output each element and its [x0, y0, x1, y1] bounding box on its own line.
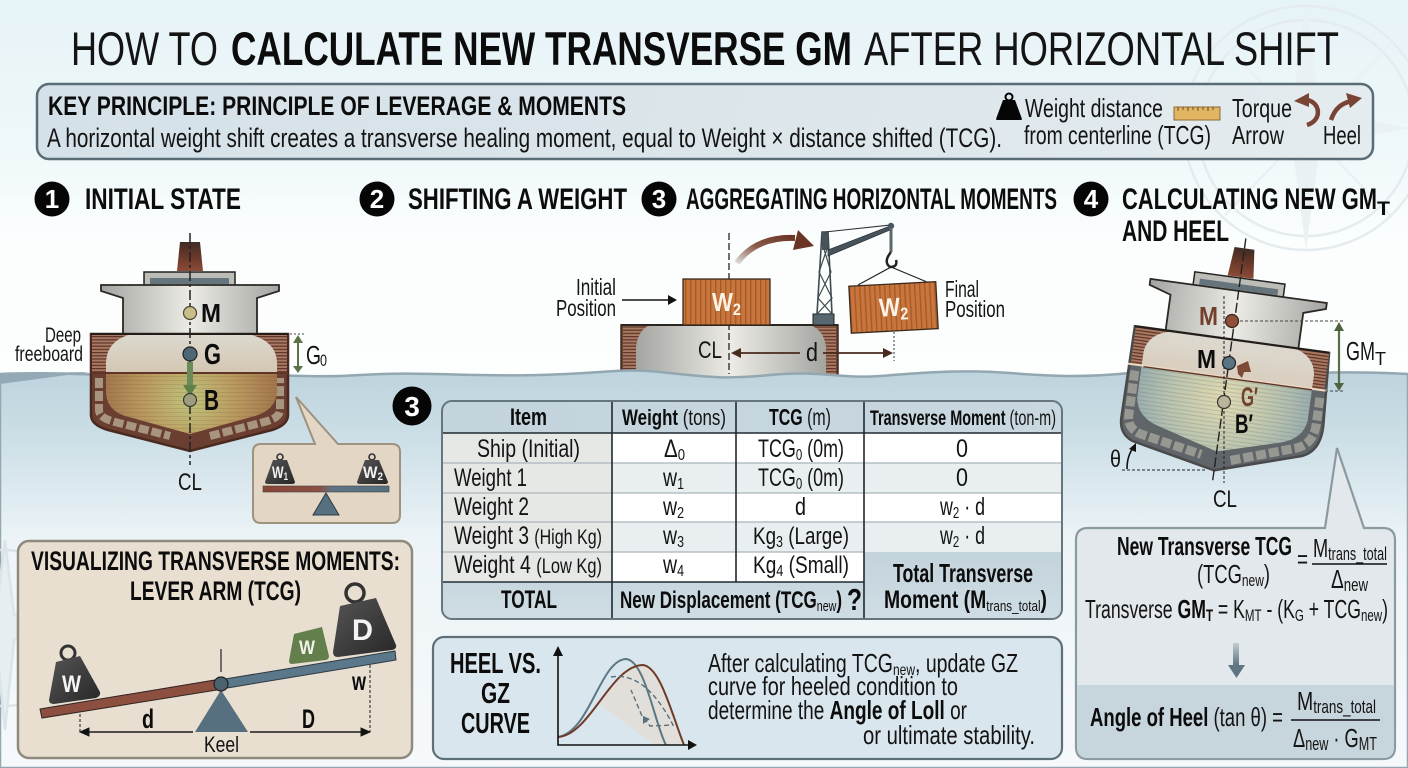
superstructure heeled — [1144, 279, 1327, 352]
weight W2: W — [363, 463, 379, 482]
point B prime: B′ — [1235, 409, 1253, 439]
angle of heel formula: Angle of Heel (tan θ) = — [1090, 702, 1283, 732]
new TCG formula: new — [1242, 571, 1264, 590]
heel heading: GZ — [481, 678, 510, 710]
row: weight 4: 4 — [776, 563, 783, 580]
heading: 4 calculating new GMT and heel — [1074, 182, 1390, 248]
arrow down — [1228, 643, 1245, 678]
row: total: New Displacement (TCG — [620, 587, 897, 614]
superstructure — [101, 285, 279, 334]
new TCG formula: Δ — [1331, 564, 1348, 594]
legend: torque arrow: Torque — [1232, 93, 1292, 123]
heel description: After calculating TCG — [708, 648, 955, 678]
formula result band — [1077, 685, 1394, 758]
label: D: D — [302, 704, 315, 734]
container initial W2: W — [712, 287, 737, 317]
new TCG formula: ) — [1264, 559, 1270, 589]
ship 2 hull section — [621, 325, 838, 380]
row: ship initial: Ship (Initial) — [477, 435, 580, 463]
angle of heel formula: Δ — [1293, 723, 1310, 753]
icon: ruler — [1174, 107, 1220, 120]
weight small green: W — [299, 638, 315, 659]
row: weight 3: Weight 3 (High Kg) — [454, 522, 602, 550]
bridge — [144, 272, 235, 286]
GMT formula: - (K — [1262, 594, 1295, 624]
weight W1 — [265, 454, 295, 484]
label: final position: Position — [945, 296, 1005, 322]
row: weight 4: (Small) — [783, 552, 849, 579]
row: ship initial: 0 — [956, 435, 968, 463]
title: HOW TO — [71, 22, 218, 75]
new TCG formula: (TCG — [1197, 559, 1261, 589]
heading: 2 shifting a weight: 2 — [370, 184, 384, 214]
heading: 2 shifting a weight: SHIFTING A WEIGHT — [408, 183, 627, 216]
balance beam — [263, 486, 389, 492]
row: weight 3: · d — [959, 522, 985, 550]
container initial W2: 2 — [733, 300, 741, 319]
row: weight 1: w — [663, 464, 681, 492]
ship 1: initial state — [91, 233, 288, 465]
new TCG formula: New Transverse TCG — [1117, 531, 1292, 561]
row: total: ? — [847, 582, 862, 617]
number badge 3 for table — [392, 386, 432, 426]
GMT formula: ) — [1382, 594, 1388, 624]
legend: torque arrow — [1232, 93, 1292, 150]
row: weight 3: 3 — [776, 534, 783, 551]
angle of heel formula: new — [1305, 734, 1329, 754]
panel: formulas — [1076, 448, 1395, 759]
lever beam — [40, 651, 396, 718]
GMT formula: Transverse GM — [1085, 594, 1219, 624]
heading: 3 aggregating horizontal moments — [642, 182, 1057, 216]
GMT formula: + TCG — [1304, 594, 1361, 624]
row: weight 1: 0 — [796, 476, 802, 493]
table: horizontal moments — [442, 401, 1062, 619]
legend: weight distance: Weight distance — [1025, 93, 1163, 123]
point G: G — [204, 339, 221, 371]
title: CALCULATE NEW TRANSVERSE GM — [231, 22, 852, 75]
row: ship initial: (0m) — [802, 435, 844, 463]
legend: weight distance: from centerline (TCG) — [1024, 120, 1211, 150]
hull heeled — [1120, 324, 1330, 472]
table header row: Weight (tons) — [622, 405, 726, 430]
row: ship initial: TCG — [758, 435, 811, 463]
row: weight 2: · d — [959, 493, 985, 521]
label: keel: Keel — [204, 732, 239, 757]
curved shift arrow — [737, 230, 814, 263]
G0 dimension: 0 — [320, 351, 327, 370]
label: w: w — [351, 668, 366, 696]
heel heading: HEEL VS. — [450, 648, 541, 680]
GMT dimension — [1240, 321, 1386, 391]
key principle heading: KEY PRINCIPLE: PRINCIPLE OF LEVERAGE & MOMENTS — [48, 91, 626, 121]
heel description: , update GZ — [915, 648, 1018, 678]
heading: 4 calculating new GMT and heel: T — [1377, 199, 1390, 220]
heel description: or ultimate stability. — [863, 720, 1035, 750]
callout: balance scale — [253, 397, 400, 523]
darker water band at left — [0, 372, 90, 384]
key principle description: A horizontal weight shift creates a transverse healing moment, equal to Weight × distance shifted (TCG). — [47, 123, 1002, 153]
new TCG formula: new — [1344, 575, 1369, 595]
point B: B — [204, 385, 219, 417]
label: deep freeboard: Deep — [45, 324, 81, 347]
angle of heel formula: trans_total — [1313, 697, 1376, 718]
container final W2: W — [878, 291, 904, 323]
diagram: shifting a weight — [556, 223, 1005, 374]
label: initial position — [556, 274, 616, 321]
row: weight 3: (Large) — [783, 523, 849, 550]
green gravity arrow — [183, 362, 197, 396]
heel angle theta — [1110, 443, 1206, 473]
weight W left: W — [62, 671, 81, 698]
table header row: Item — [510, 404, 547, 431]
GMT formula: T — [1206, 606, 1213, 625]
total transverse moment cell: ) — [1041, 586, 1047, 614]
row: weight 2: w — [663, 493, 681, 521]
table header row — [510, 404, 1056, 431]
legend: weight distance — [1024, 93, 1211, 150]
hull centerline — [728, 233, 730, 374]
row: weight 1: 0 — [956, 464, 968, 492]
heading: 4 calculating new GMT and heel: 4 — [1084, 184, 1099, 214]
row: weight 3: w — [663, 522, 681, 550]
angle of heel formula: M — [1297, 686, 1319, 716]
point M upper — [1199, 301, 1238, 331]
weight D: D — [352, 614, 373, 647]
heel description: new — [893, 662, 915, 679]
heeled centerline — [1212, 238, 1246, 483]
point M: M — [201, 298, 221, 328]
total transverse moment cell: Moment (M — [884, 586, 986, 614]
point G prime: G′ — [1241, 382, 1258, 412]
lever heading: LEVER ARM (TCG) — [130, 576, 301, 606]
label: deep freeboard: freeboard — [15, 343, 83, 366]
heading: 1 initial state: INITIAL STATE — [85, 183, 241, 216]
row: total — [501, 582, 862, 617]
GMT dimension: T — [1375, 349, 1386, 369]
arrow: initial position — [622, 295, 677, 305]
row: weight 3 — [454, 522, 985, 551]
table outline — [442, 401, 1062, 619]
heading: 2 shifting a weight — [360, 182, 627, 216]
weight small green — [289, 627, 329, 664]
heel description: determine the Angle of Loll or — [708, 695, 967, 725]
table shading — [442, 401, 1062, 619]
funnel heeled — [1228, 247, 1257, 279]
label: deep freeboard — [15, 324, 83, 366]
fulcrum — [195, 649, 248, 732]
vertical centerline — [1223, 296, 1225, 483]
row: weight 2: w — [940, 493, 958, 521]
GMT formula: MT — [1245, 606, 1262, 625]
heel heading: CURVE — [461, 708, 530, 740]
GMT dimension: GM — [1346, 336, 1375, 366]
angle of heel formula — [1090, 686, 1380, 754]
G0 dimension: G — [306, 340, 321, 370]
weight W2 — [357, 454, 388, 484]
row: weight 4: Kg — [753, 552, 782, 579]
new TCG formula: M — [1313, 533, 1335, 563]
weight W2: 2 — [377, 471, 383, 483]
number badge 3 for table: 3 — [404, 391, 420, 422]
label: CL ship 1: CL — [178, 469, 202, 496]
new TCG formula — [1117, 531, 1387, 595]
row: total: TOTAL — [501, 586, 557, 614]
heel description — [708, 648, 1035, 750]
point B — [184, 385, 219, 417]
balance fulcrum — [313, 493, 339, 515]
container final W2 — [849, 282, 938, 333]
label: CL ship 2: CL — [698, 337, 722, 364]
weight D — [333, 584, 396, 657]
row: weight 1: TCG — [758, 464, 811, 492]
row: weight 2 — [454, 493, 985, 522]
label: initial position: Initial — [576, 274, 616, 300]
row: weight 2: 2 — [953, 505, 959, 522]
label: CL ship 4: CL — [1213, 486, 1237, 513]
row: weight 1: 1 — [677, 476, 684, 493]
heading: 1 initial state — [34, 182, 241, 216]
table grid — [442, 463, 1062, 552]
icon: torque arrow — [1294, 93, 1318, 125]
bridge heeled — [1193, 272, 1285, 298]
panel: lever arm — [18, 541, 412, 758]
funnel — [177, 242, 203, 271]
label: final position — [945, 276, 1005, 322]
row: weight 3: Kg — [753, 523, 782, 550]
crane — [813, 223, 927, 325]
G0 dimension — [290, 334, 327, 373]
icon: weight legend — [996, 94, 1022, 120]
row: weight 4: 4 — [677, 563, 684, 580]
dimension d: d — [806, 337, 818, 367]
heel heading — [450, 648, 541, 740]
table header row: Transverse Moment (ton-m) — [870, 407, 1056, 430]
row: weight 2: Weight 2 — [454, 493, 529, 521]
row: weight 1: (0m) — [802, 464, 844, 492]
point M lower: M — [1197, 344, 1216, 374]
total transverse moment cell: trans_total — [986, 598, 1041, 615]
row: weight 2: d — [795, 493, 806, 521]
weight W left — [49, 646, 100, 704]
compass rose watermark top right — [1184, 0, 1408, 250]
table header row: TCG (m) — [769, 404, 831, 430]
row: weight 4 — [454, 551, 849, 580]
label: initial position: Position — [556, 295, 616, 321]
row: weight 3: 2 — [953, 534, 959, 551]
table grid main — [442, 401, 1062, 619]
GMT formula: = K — [1213, 594, 1245, 624]
container final W2: 2 — [900, 304, 909, 324]
weight W1: W — [272, 463, 288, 482]
row: weight 4: Weight 4 (Low Kg) — [454, 551, 602, 579]
point B prime — [1218, 396, 1253, 439]
angle of heel formula: · G — [1328, 723, 1359, 753]
row: weight 3: 3 — [677, 534, 684, 551]
label: d: d — [142, 704, 154, 734]
row: ship initial: 0 — [796, 447, 802, 464]
heading: 3 aggregating horizontal moments: 3 — [652, 184, 666, 214]
total transverse moment cell: Total Transverse — [893, 558, 1033, 588]
point M upper: M — [1199, 301, 1218, 331]
point G — [183, 339, 221, 371]
lever heading — [31, 546, 400, 606]
row: weight 4: w — [663, 551, 681, 579]
heading: 3 aggregating horizontal moments: AGGREGATING HORIZONTAL MOMENTS — [686, 183, 1057, 216]
water — [0, 370, 1408, 768]
point M lower — [1197, 344, 1236, 374]
panel: key principle — [37, 84, 1373, 159]
ship 4: heeled — [1120, 238, 1330, 483]
new TCG formula: = — [1297, 544, 1308, 574]
row: weight 1 — [454, 464, 968, 493]
lever heading: VISUALIZING TRANSVERSE MOMENTS: — [31, 546, 400, 576]
compass rose watermark bottom left — [0, 540, 83, 730]
weight W1: 1 — [284, 471, 288, 483]
heel description: curve for heeled condition to — [708, 671, 958, 701]
GZ chart — [553, 646, 697, 750]
row: ship initial — [477, 435, 968, 464]
row: weight 3: w — [940, 522, 958, 550]
small heel marker — [1237, 361, 1251, 378]
centerline — [189, 233, 191, 465]
legend: heel: Heel — [1323, 120, 1361, 150]
point M — [184, 298, 221, 328]
row: weight 1: Weight 1 — [454, 464, 527, 492]
row: total: ) — [836, 587, 842, 614]
label: final position: Final — [945, 276, 979, 302]
title — [71, 22, 1339, 75]
row: weight 2: 2 — [677, 505, 684, 522]
row: ship initial: Δ — [664, 435, 681, 463]
heading: 1 initial state: 1 — [45, 184, 59, 214]
dimension d — [731, 332, 894, 367]
icon: heel arrow — [1331, 93, 1362, 120]
row: ship initial: 0 — [678, 447, 685, 464]
panel: heel vs GZ curve — [433, 637, 1062, 759]
heading: 4 calculating new GMT and heel: AND HEEL — [1122, 215, 1229, 248]
angle of heel formula: MT — [1359, 734, 1377, 754]
hull — [91, 334, 288, 451]
GMT formula: new — [1361, 606, 1383, 625]
row: total: new — [817, 598, 836, 615]
legend: torque arrow: Arrow — [1232, 120, 1284, 150]
distance dimension lines — [80, 665, 370, 736]
total transverse moment cell — [884, 558, 1047, 615]
container initial W2 — [683, 279, 770, 325]
GMT formula: G — [1295, 606, 1304, 625]
heel angle theta: θ — [1110, 446, 1121, 473]
